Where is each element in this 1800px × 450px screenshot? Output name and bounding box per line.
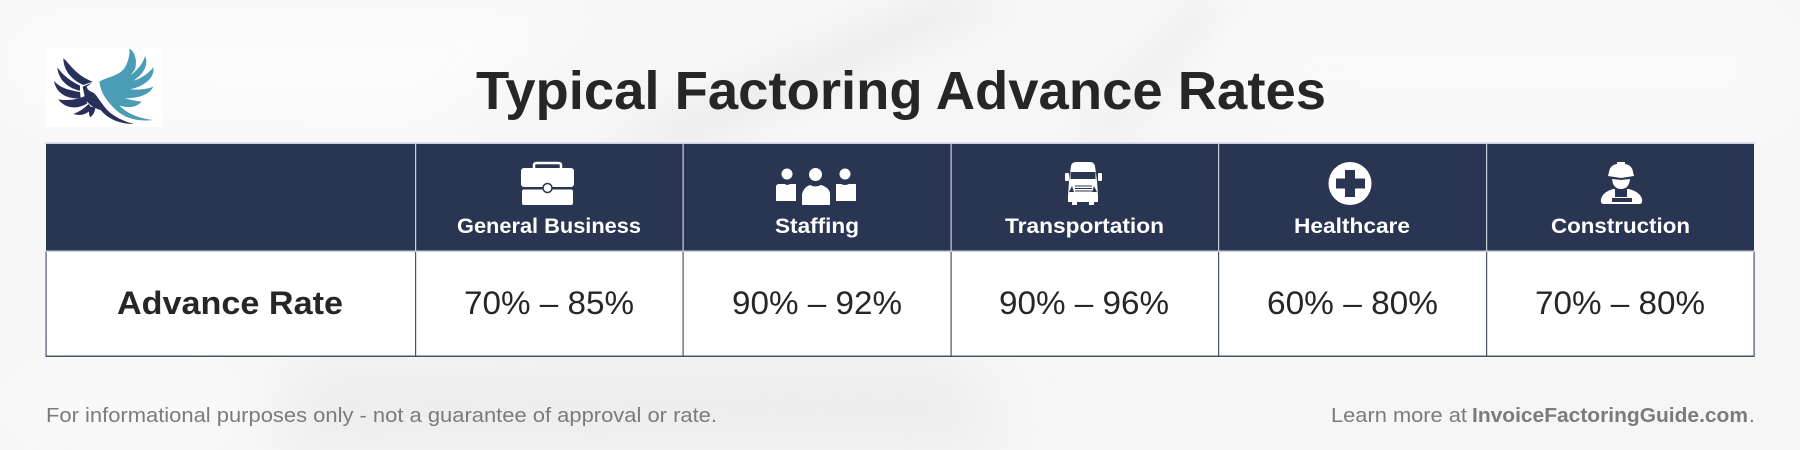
value: Transportation: 90% – 96% (999, 285, 1169, 321)
header label: Construction: Construction (1551, 215, 1690, 238)
footer source link: . (1749, 404, 1755, 427)
footer source link: Learn more at (1331, 404, 1467, 427)
icon: construction worker (1601, 162, 1642, 204)
header label: Staffing: Staffing (775, 215, 859, 238)
logo: navy wing (54, 58, 134, 124)
icon: briefcase (521, 163, 574, 205)
title: Typical Factoring Advance Rates (476, 61, 1326, 121)
row label: Advance Rate: Advance Rate (117, 285, 343, 321)
icon: medical cross (1328, 162, 1372, 205)
icon: truck (1065, 162, 1102, 205)
table: advance rates by industry (45, 142, 1755, 357)
value: Construction: 70% – 80% (1535, 285, 1705, 321)
header label: General Business: General Business (457, 215, 641, 238)
footer source link: InvoiceFactoringGuide.com (1472, 404, 1748, 427)
table header band (46, 143, 1754, 251)
value: Healthcare: 60% – 80% (1267, 285, 1438, 321)
icon: people (776, 168, 856, 205)
header label: Healthcare: Healthcare (1294, 215, 1410, 238)
table value row (46, 252, 1754, 356)
logo: teal wing (99, 48, 154, 120)
footer disclaimer: For informational purposes only - not a guarantee of approval or rate. (46, 404, 717, 427)
footer source link (1331, 404, 1755, 427)
value: Staffing: 90% – 92% (732, 285, 902, 321)
logo: eagle wings (46, 48, 162, 127)
header label: Transportation: Transportation (1005, 215, 1164, 238)
value: General Business: 70% – 85% (464, 285, 634, 321)
